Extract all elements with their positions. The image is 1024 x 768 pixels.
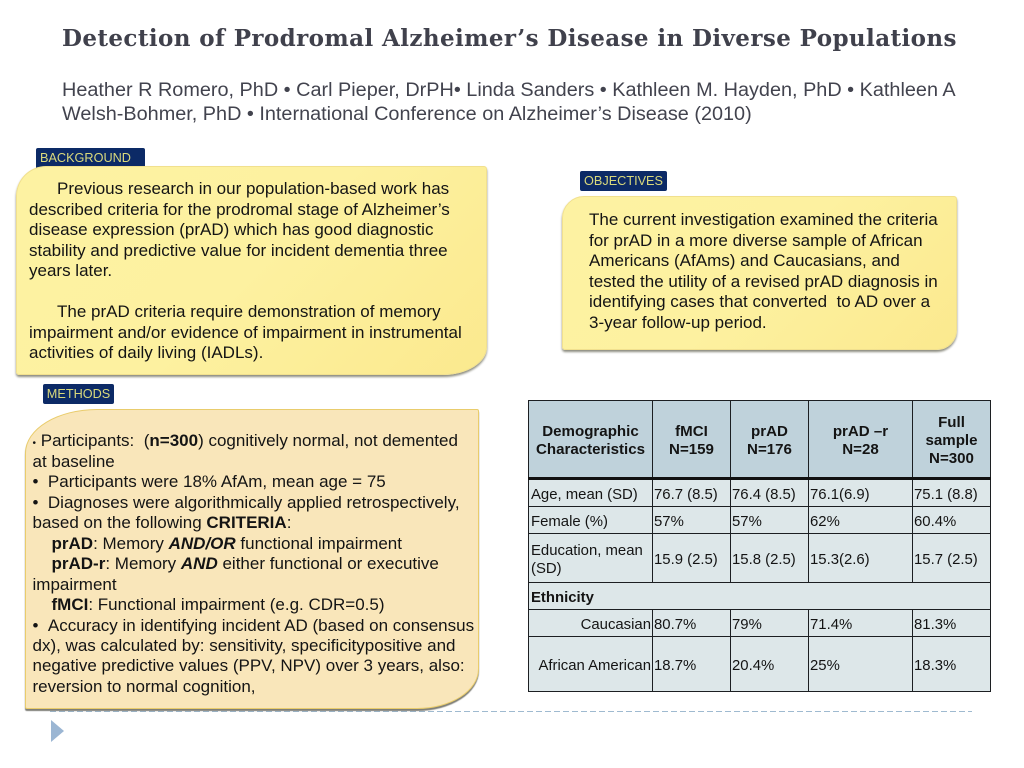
table: demographic characteristics: 60.4%: [914, 514, 956, 530]
table: demographic characteristics: Age, mean (SD): [531, 487, 638, 503]
background text: [29, 179, 462, 362]
label: objectives: OBJECTIVES: [584, 174, 663, 188]
background text: described criteria for the prodromal stage of Alzheimer’s: [29, 200, 450, 218]
methods text: prAD: Memory AND/OR functional impairment: [52, 534, 402, 553]
table: demographic characteristics: N=300: [929, 450, 974, 466]
methods text: negative predictive values (PPV, NPV) over 3 years, also:: [32, 656, 465, 675]
background text: stability and predictive value for incident dementia three: [29, 240, 448, 260]
methods text: based on the following CRITERIA:: [32, 513, 291, 532]
objectives text: identifying cases that converted to AD over a: [589, 292, 930, 311]
objectives text: for prAD in a more diverse sample of African: [589, 231, 923, 250]
table: demographic characteristics: Ethnicity: [531, 590, 594, 606]
table: demographic characteristics: N=28: [842, 440, 879, 458]
background text: Previous research in our population-based work has: [57, 179, 449, 198]
table: demographic characteristics: 57%: [654, 514, 684, 530]
table: demographic characteristics: Full: [938, 414, 965, 430]
table: demographic characteristics: Characteristics: [536, 440, 645, 458]
methods text: [32, 430, 474, 696]
objectives text: [589, 210, 938, 332]
panel: methods: [25, 409, 479, 709]
table: demographic characteristics: 76.7 (8.5): [654, 487, 718, 503]
table: demographic characteristics: N=176: [747, 440, 792, 458]
table: demographic characteristics: Education, mean: [531, 543, 643, 559]
table: demographic characteristics: 20.4%: [732, 658, 774, 674]
table: demographic characteristics: 25%: [810, 658, 840, 674]
table: demographic characteristics: 57%: [732, 514, 762, 530]
methods text: reversion to normal cognition,: [32, 677, 256, 696]
methods text: • Diagnoses were algorithmically applied retrospectively,: [32, 493, 460, 512]
table: demographic characteristics: 76.4 (8.5): [732, 487, 796, 503]
table: demographic characteristics: 79%: [732, 617, 762, 633]
label: methods: [43, 384, 114, 404]
table: demographic characteristics: 75.1 (8.8): [914, 487, 978, 503]
methods text: dx), was calculated by: sensitivity, specificitypositive and: [32, 636, 455, 655]
divider: dashed footer line: [50, 711, 972, 712]
authors and conference: Welsh-Bohmer, PhD • International Conference on Alzheimer’s Disease (2010): [62, 103, 752, 125]
panel: background: [16, 166, 487, 375]
table: demographic characteristics: 15.3(2.6): [810, 552, 870, 568]
table: demographic characteristics: Demographic: [542, 422, 639, 440]
authors and conference: Heather R Romero, PhD • Carl Pieper, DrPH• Linda Sanders • Kathleen M. Hayden, PhD • Kathleen A: [62, 79, 956, 101]
background text: The prAD criteria require demonstration of memory: [57, 302, 441, 321]
table: demographic characteristics: 81.3%: [914, 617, 956, 633]
table: demographic characteristics: 80.7%: [654, 617, 696, 633]
table: demographic characteristics: 76.1(6.9): [810, 487, 870, 503]
methods text: at baseline: [32, 452, 115, 471]
methods text: impairment: [32, 575, 117, 594]
panel: objectives: [562, 196, 957, 350]
label: background: BACKGROUND: [40, 151, 131, 165]
methods text: fMCI: Functional impairment (e.g. CDR=0.5): [52, 595, 385, 614]
table: demographic characteristics: prAD: [751, 422, 788, 440]
objectives text: tested the utility of a revised prAD diagnosis in: [589, 272, 938, 291]
methods text: • Accuracy in identifying incident AD (based on consensus: [32, 616, 474, 635]
table: demographic characteristics: 62%: [810, 514, 840, 530]
table: demographic characteristics: African American: [538, 658, 651, 674]
table: demographic characteristics: 15.9 (2.5): [654, 552, 718, 568]
icon: footer triangle: [51, 720, 64, 742]
label: methods: METHODS: [47, 387, 110, 401]
table: demographic characteristics: 15.8 (2.5): [732, 552, 796, 568]
background text: impairment and/or evidence of impairment in instrumental: [29, 322, 462, 342]
table: demographic characteristics: prAD –r: [833, 422, 888, 440]
label: background: [36, 148, 145, 172]
objectives text: The current investigation examined the criteria: [589, 210, 938, 229]
table: demographic characteristics: 15.7 (2.5): [914, 552, 978, 568]
table: demographic characteristics: 18.3%: [914, 658, 956, 674]
methods text: • Participants: (n=300) cognitively normal, not demented: [32, 430, 458, 450]
table: demographic characteristics: [528, 400, 991, 692]
table: demographic characteristics: sample: [925, 432, 978, 448]
methods text: prAD-r: Memory AND either functional or executive: [52, 554, 439, 573]
background text: disease expression (prAD) which has good diagnostic: [29, 220, 433, 239]
table: demographic characteristics: 71.4%: [810, 617, 852, 633]
objectives text: 3-year follow-up period.: [589, 313, 767, 332]
label: objectives: [580, 171, 667, 191]
table: demographic characteristics: 18.7%: [654, 658, 696, 674]
background text: years later.: [29, 261, 112, 280]
objectives text: Americans (AfAms) and Caucasians, and: [589, 251, 900, 270]
table: demographic characteristics: Female (%): [531, 514, 608, 530]
table: demographic characteristics: fMCI: [675, 422, 708, 440]
table: demographic characteristics: Caucasian: [581, 617, 651, 633]
table: demographic characteristics: (SD): [531, 560, 562, 576]
authors and conference: [62, 79, 956, 125]
table: demographic characteristics: N=159: [669, 440, 714, 458]
methods text: • Participants were 18% AfAm, mean age = 75: [32, 472, 386, 491]
title: Detection of Prodromal Alzheimer’s Disease in Diverse Populations: [62, 25, 957, 52]
background text: activities of daily living (IADLs).: [29, 343, 263, 362]
